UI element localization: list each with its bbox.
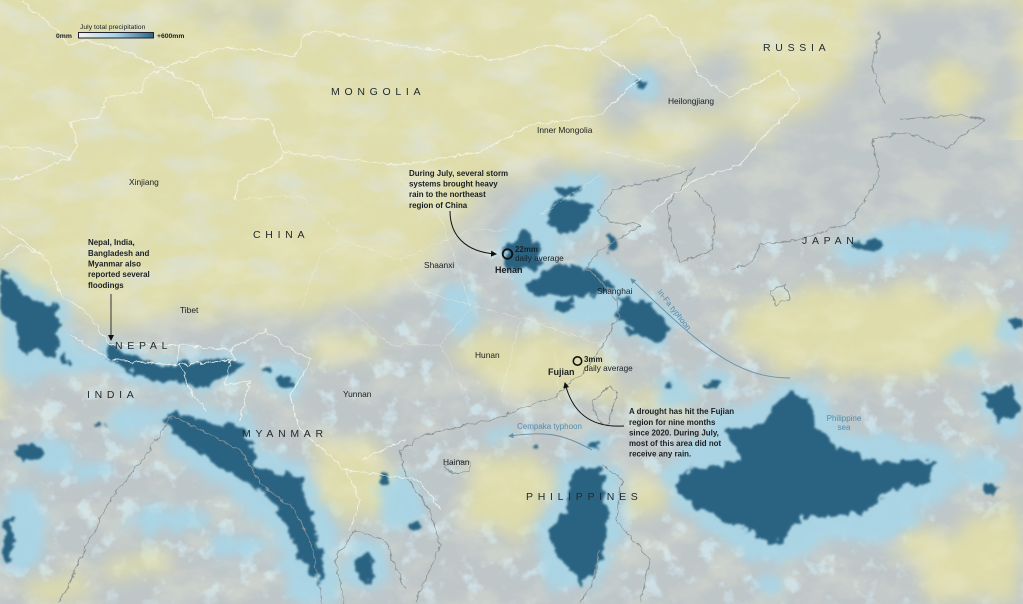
annotation: Fujian drought: A drought has hit the Fujian — [629, 407, 734, 416]
country and region labels: INDIA — [87, 389, 139, 401]
country and region labels: CHINA — [253, 229, 309, 241]
annotation: Nepal floods: Bangladesh and — [88, 249, 149, 258]
annotation: Fujian drought: most of this area did not — [629, 439, 722, 448]
annotation: Nepal floods: Myanmar also — [88, 260, 141, 268]
country and region labels: PHILIPPINES — [526, 491, 642, 503]
country and region labels: Yunnan — [343, 389, 372, 399]
country and region labels: RUSSIA — [763, 42, 830, 54]
annotation: Fujian drought — [565, 383, 734, 458]
legend: +600mm — [157, 33, 184, 40]
country and region labels: MONGOLIA — [331, 86, 425, 98]
annotation: Nepal floods: Nepal, India, — [88, 238, 135, 247]
scattered faint rain inside gray zones — [0, 200, 1023, 604]
marker: Fujian: Fujian — [548, 367, 574, 377]
country and region labels: Xinjiang — [129, 177, 159, 187]
sea and typhoon labels — [517, 288, 862, 432]
marker: Fujian: 3mm — [584, 355, 603, 364]
country and region labels: NEPAL — [115, 340, 172, 352]
legend — [56, 24, 184, 40]
marker: Henan — [495, 245, 564, 275]
country and region labels: Shaanxi — [424, 260, 454, 270]
country and region labels: Shanghai — [597, 286, 633, 296]
sea and typhoon labels: sea — [838, 423, 851, 432]
annotation: Fujian drought: since 2020. During July, — [629, 428, 719, 438]
country and region labels: Heilongjiang — [668, 96, 714, 106]
country and region labels — [87, 42, 859, 503]
typhoon tracks — [509, 279, 790, 450]
annotation: Nepal floods: floodings — [88, 281, 124, 290]
annotation: Nepal floods: reported several — [88, 270, 150, 279]
marker: Henan: daily average — [515, 254, 564, 263]
country and region labels: Hainan — [443, 457, 470, 467]
annotation: Fujian drought: receive any rain. — [629, 450, 691, 458]
annotation: northeast China storms: systems brought heavy — [409, 180, 498, 188]
sea and typhoon labels: Cempaka typhoon — [517, 422, 582, 431]
province borders — [235, 150, 690, 400]
gray base at south and east edges — [0, 140, 1023, 604]
sea and typhoon labels: In-Fa typhoon — [655, 288, 693, 332]
annotation: northeast China storms: rain to the northeast — [409, 190, 486, 199]
marker: Fujian — [548, 355, 633, 377]
annotation: northeast China storms — [409, 169, 508, 254]
legend: 0mm — [56, 33, 72, 40]
marker: Henan: Henan — [495, 265, 523, 275]
country borders — [1, 1, 800, 530]
country and region labels: Hunan — [475, 350, 500, 360]
sea and typhoon labels: Philippine — [827, 414, 862, 423]
legend: July total precipitation — [80, 24, 146, 31]
country and region labels: MYANMAR — [242, 428, 328, 440]
marker: Fujian: daily average — [584, 364, 633, 373]
country and region labels: JAPAN — [802, 235, 859, 247]
annotation: Nepal floods — [88, 238, 150, 340]
annotation: northeast China storms: During July, several storm — [409, 169, 508, 178]
country and region labels: Tibet — [180, 305, 199, 315]
marker: Henan: 22mm — [515, 245, 538, 254]
annotation: northeast China storms: region of China — [409, 201, 468, 210]
country and region labels: Inner Mongolia — [537, 125, 593, 135]
annotation: Fujian drought: region for nine months — [629, 418, 716, 427]
